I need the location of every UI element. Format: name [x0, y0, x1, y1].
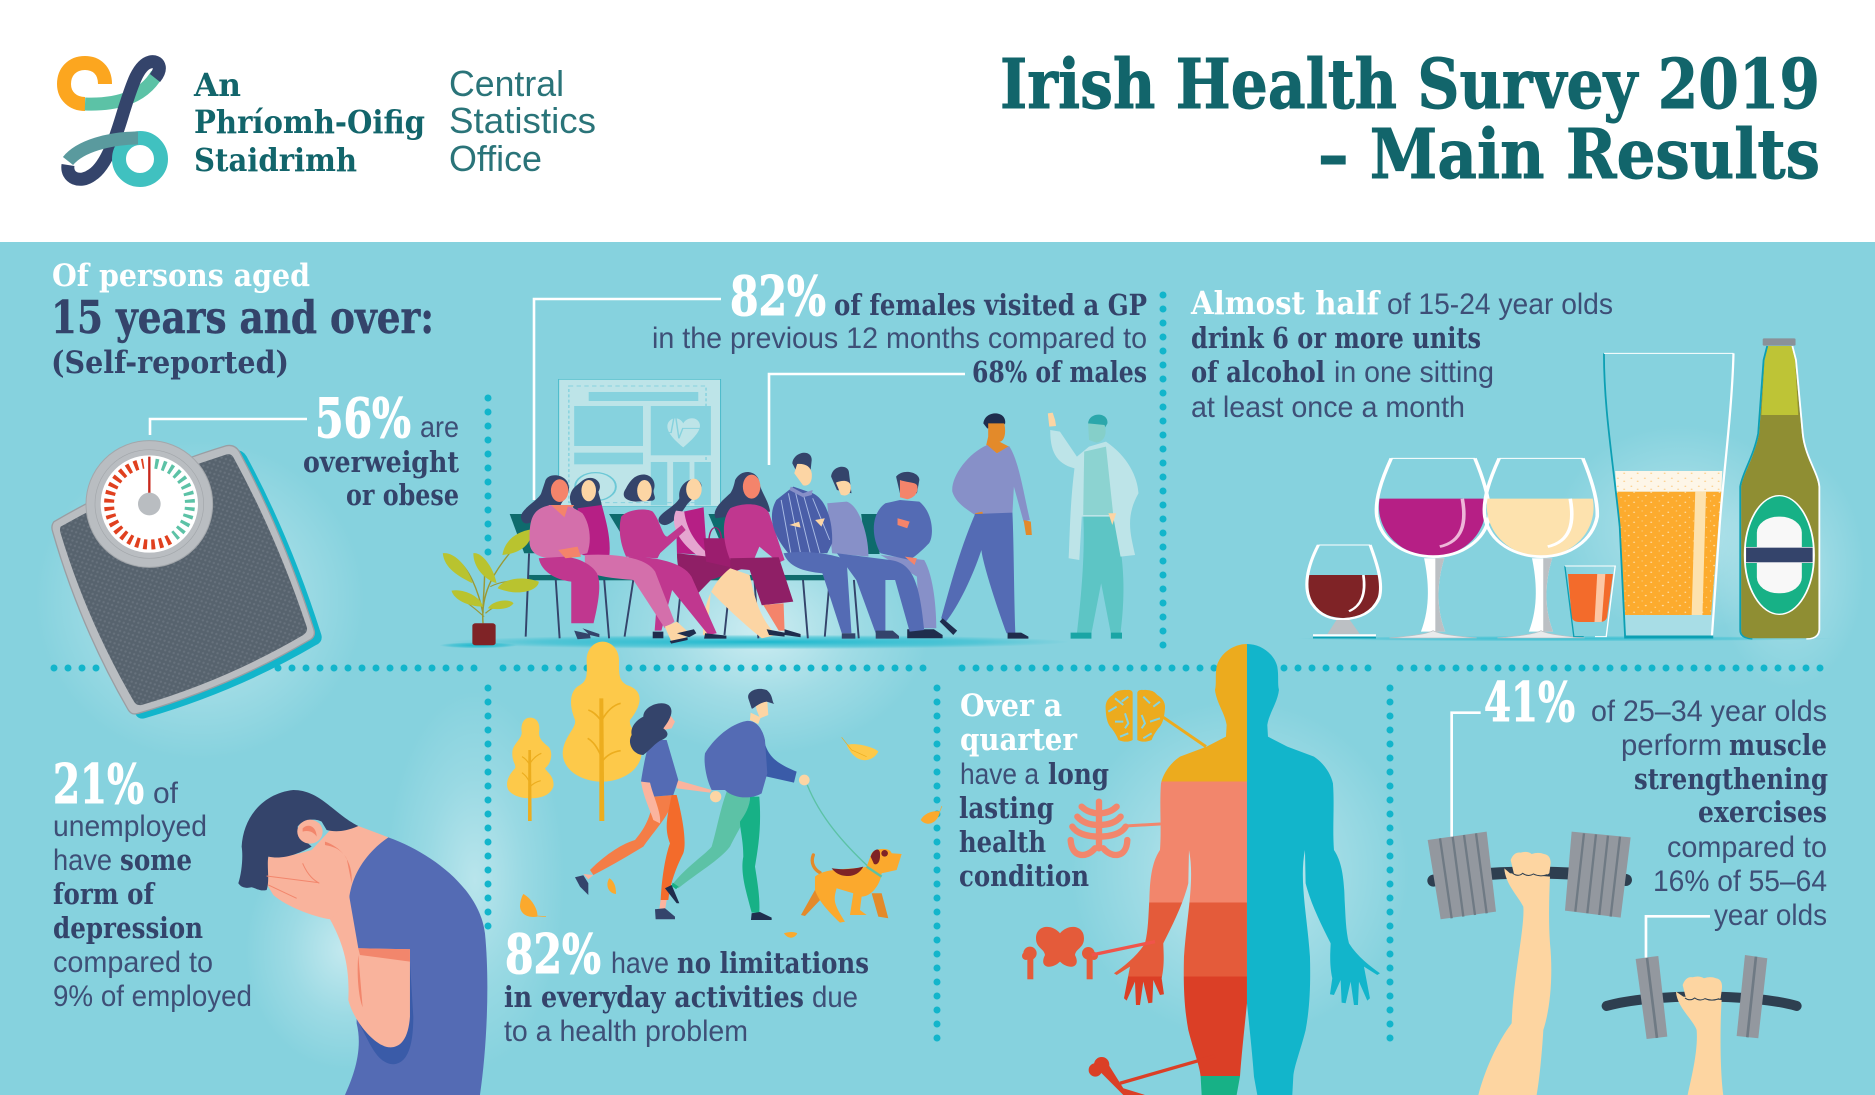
stat: muscle strengthening: exercises: [1698, 795, 1827, 829]
stat: no limitations: in everyday activities: [504, 980, 804, 1014]
woman 3: [620, 474, 726, 639]
illustration: human body with conditions: [1022, 644, 1380, 1095]
stat: no limitations: 82%: [505, 922, 601, 986]
illustration: man with head in hands: [238, 790, 487, 1095]
small dumbbell and arm: [1607, 955, 1797, 1095]
stat: 56% overweight: or obese: [346, 478, 459, 512]
shot glass: [1565, 566, 1615, 637]
stat: long lasting health condition: lasting: [959, 791, 1054, 825]
stat: alcohol: Almost half: [1190, 284, 1381, 322]
body: teal half: [1247, 644, 1380, 1095]
large dumbbell and arm: [1428, 832, 1631, 1095]
icon: brain: [1106, 690, 1206, 747]
large red wine glass: [1376, 458, 1489, 638]
stat: muscle strengthening: of 25–34 year olds: [1591, 695, 1827, 728]
woman 1: [521, 475, 599, 639]
stat: long lasting health condition: condition: [959, 859, 1089, 893]
stat: GP visits: of females visited a GP: [834, 288, 1147, 322]
stat: alcohol: in one sitting: [1334, 356, 1494, 389]
intro heading: 15 years and over:: [51, 291, 434, 344]
background panel: [0, 242, 1875, 1095]
stat: no limitations: due: [812, 981, 858, 1014]
stat: muscle strengthening: year olds: [1714, 899, 1827, 932]
stat: no limitations: to a health problem: [504, 1015, 748, 1048]
stat: depression: compared to: [53, 946, 213, 979]
stat: muscle strengthening: strengthening: [1634, 762, 1828, 796]
dog on a lead: [801, 785, 902, 923]
stat: long lasting health condition: have a: [960, 758, 1039, 791]
man 3: [874, 472, 943, 638]
stat: muscle strengthening: 16% of 55–64: [1653, 865, 1827, 898]
stat: GP visits: [652, 264, 1147, 389]
stat: depression: some: [120, 843, 192, 877]
stat: long lasting health condition: health: [959, 825, 1046, 859]
connector line: large dumbbell: [1452, 713, 1481, 837]
title: [1000, 45, 1820, 195]
chairs: [510, 514, 880, 638]
woman walking: [575, 703, 712, 919]
man 2: [827, 467, 924, 639]
logo text: English name: Office: [449, 138, 542, 179]
ground shadow: [1296, 636, 1836, 641]
icon: ribcage: [1071, 802, 1160, 855]
stat: muscle strengthening: perform: [1621, 729, 1722, 762]
stat: muscle strengthening: [1484, 670, 1828, 932]
logo mark: [64, 62, 161, 180]
stat: depression: depression: [53, 911, 203, 945]
woman 2: [570, 478, 696, 644]
illustration: drinks: [1296, 338, 1836, 641]
logo text: Irish name: [193, 66, 425, 179]
stat: long lasting health condition: [959, 688, 1109, 893]
title: – Main Results: [1318, 115, 1820, 195]
stat: 56% overweight: [303, 386, 460, 512]
ground shadow: [449, 635, 1070, 649]
woman 4: [659, 479, 776, 638]
trees: [507, 642, 642, 821]
logo text: English name: Central: [449, 63, 564, 104]
stat: depression: have: [53, 844, 112, 877]
logo text: Irish name: Staidrimh: [194, 141, 357, 179]
stat: long lasting health condition: quarter: [960, 722, 1078, 758]
stat: muscle strengthening: 41%: [1484, 670, 1575, 734]
stat: depression: of: [153, 777, 179, 810]
stat: long lasting health condition: Over a: [960, 688, 1062, 724]
stat: no limitations: no limitations: [677, 946, 869, 980]
standing man: [940, 413, 1032, 639]
connector line: small dumbbell: [1646, 916, 1710, 958]
man walking: [665, 689, 810, 920]
stat: 56% overweight: 56%: [315, 386, 411, 450]
connector line: [150, 419, 307, 435]
stat: depression: form of: [53, 877, 156, 911]
dotted dividers: [54, 295, 1824, 1039]
soft glows behind illustrations: [35, 425, 1865, 1070]
stat: alcohol: [1190, 284, 1613, 424]
woman 5: [715, 472, 801, 637]
icon: femur bone: [1089, 1056, 1215, 1095]
icon: pelvis and hip joints: [1022, 927, 1155, 979]
stat: alcohol: drink 6 or more units: [1191, 321, 1481, 355]
stat: GP visits: in the previous 12 months compared to: [652, 322, 1147, 355]
icon: scale: [52, 441, 322, 719]
logo text: English name: Statistics: [449, 100, 596, 141]
falling leaves: [520, 737, 942, 938]
poster: [559, 379, 721, 507]
stat: muscle strengthening: compared to: [1667, 831, 1827, 864]
pint of beer: [1604, 353, 1733, 637]
intro heading: Of persons aged: [52, 258, 310, 294]
stat: 56% overweight: overweight: [303, 445, 460, 479]
panel: bathroom scale: [52, 419, 322, 719]
stat: GP visits: 68% of males: [972, 355, 1147, 389]
illustration: GP waiting room: [439, 379, 1138, 649]
logo text: Irish name: Phríomh-Oifig: [194, 103, 425, 141]
stat: GP visits: 82%: [730, 264, 826, 328]
stat: alcohol: at least once a month: [1191, 391, 1465, 424]
stat: alcohol: of 15-24 year olds: [1387, 288, 1613, 321]
stat: alcohol: of alcohol: [1191, 355, 1325, 389]
stat: depression: unemployed: [53, 810, 207, 843]
stat: depression: 9% of employed: [53, 980, 252, 1013]
stat: 56% overweight: are: [420, 411, 459, 444]
body: coloured half: [1114, 644, 1247, 1095]
stat: muscle strengthening: muscle: [1729, 728, 1827, 762]
stat: no limitations: [504, 922, 869, 1048]
stat: depression: 21%: [53, 752, 144, 816]
logo text: English name: [449, 63, 596, 179]
logo text: Irish name: An: [193, 66, 241, 104]
plant: [439, 529, 539, 648]
illustration: dumbbells: [1428, 713, 1797, 1095]
doctor: [1048, 413, 1138, 639]
beer bottle: [1740, 338, 1819, 639]
small red wine glass: [1307, 545, 1381, 638]
intro heading: (Self-reported): [51, 345, 289, 381]
stat: depression: [53, 752, 252, 1013]
white wine glass: [1484, 458, 1597, 638]
man 1: [772, 453, 855, 639]
intro heading: [51, 258, 434, 381]
stat: long lasting health condition: long: [1048, 757, 1109, 791]
illustration: couple walking a dog: [507, 642, 942, 938]
stat: no limitations: have: [611, 947, 669, 980]
connector lines: GP visits: [534, 299, 965, 500]
